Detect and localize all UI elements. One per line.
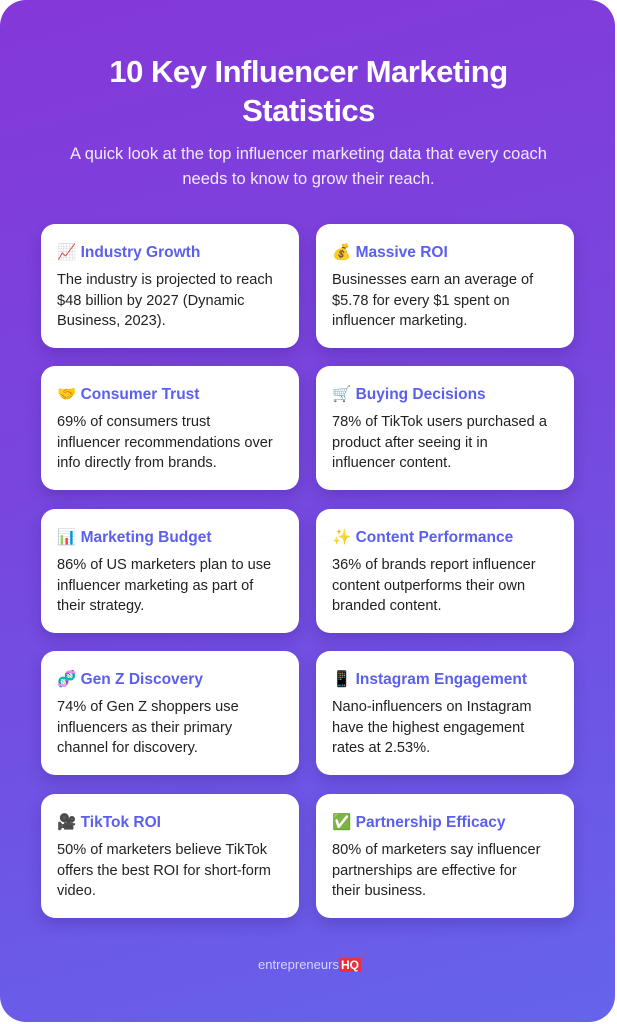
card: Gen Z Discovery xyxy=(41,651,299,775)
title xyxy=(109,54,508,128)
card: Consumer Trust: info directly from brands. xyxy=(57,455,217,471)
card: Instagram Engagement: Nano-influencers on Instagram xyxy=(332,699,532,715)
card: TikTok ROI: offers the best ROI for short-form xyxy=(57,862,271,878)
card: Partnership Efficacy xyxy=(316,794,574,918)
card: Massive ROI: influencer marketing. xyxy=(332,313,467,329)
card: Massive ROI: 💰 Massive ROI xyxy=(332,244,448,261)
card: Gen Z Discovery: 74% of Gen Z shoppers use xyxy=(57,699,239,715)
card: TikTok ROI: video. xyxy=(57,883,96,899)
card: Marketing Budget: influencer marketing as part of xyxy=(57,578,253,594)
card: Consumer Trust: 🤝 Consumer Trust xyxy=(57,386,199,403)
card: Industry Growth: Business, 2023). xyxy=(57,313,166,329)
card: Gen Z Discovery: 🧬 Gen Z Discovery xyxy=(57,671,203,688)
card: Gen Z Discovery: influencers as their primary xyxy=(57,720,232,736)
card: Industry Growth: The industry is projected to reach xyxy=(57,272,273,288)
card: Content Performance: content outperforms their own xyxy=(332,578,525,594)
card: Buying Decisions: 🛒 Buying Decisions xyxy=(332,386,486,403)
card: Buying Decisions: influencer content. xyxy=(332,455,451,471)
card: Marketing Budget xyxy=(41,509,299,633)
card: Marketing Budget: 86% of US marketers plan to use xyxy=(57,557,271,573)
card: Partnership Efficacy: partnerships are effective for xyxy=(332,862,517,878)
card: Consumer Trust: influencer recommendations over xyxy=(57,434,273,450)
card: Marketing Budget: 📊 Marketing Budget xyxy=(57,529,212,546)
card: TikTok ROI: 50% of marketers believe TikTok xyxy=(57,842,267,858)
card: Buying Decisions: 78% of TikTok users purchased a xyxy=(332,414,547,430)
logo: entrepreneursHQ xyxy=(258,957,359,972)
card: Partnership Efficacy: their business. xyxy=(332,883,426,899)
card: Instagram Engagement xyxy=(316,651,574,775)
card: Instagram Engagement: rates at 2.53%. xyxy=(332,740,430,756)
card: Buying Decisions xyxy=(316,366,574,490)
subtitle: needs to know to grow their reach. xyxy=(182,170,435,188)
card: Industry Growth: 📈 Industry Growth xyxy=(57,244,200,261)
card: Massive ROI: $5.78 for every $1 spent on xyxy=(332,292,510,308)
card: TikTok ROI xyxy=(41,794,299,918)
subtitle: A quick look at the top influencer marketing data that every coach xyxy=(70,145,547,163)
card: Partnership Efficacy: 80% of marketers say influencer xyxy=(332,842,540,858)
subtitle xyxy=(70,145,547,188)
card: Industry Growth: $48 billion by 2027 (Dynamic xyxy=(57,292,244,308)
card: Buying Decisions: product after seeing it in xyxy=(332,434,488,450)
card: Massive ROI: Businesses earn an average of xyxy=(332,272,533,288)
title: 10 Key Influencer Marketing xyxy=(109,54,508,89)
card: Gen Z Discovery: channel for discovery. xyxy=(57,740,198,756)
card: Industry Growth xyxy=(41,224,299,348)
card: Consumer Trust: 69% of consumers trust xyxy=(57,414,210,430)
card: Content Performance: 36% of brands report influencer xyxy=(332,557,536,573)
card: Content Performance xyxy=(316,509,574,633)
card: Content Performance: ✨ Content Performance xyxy=(332,529,513,546)
title: Statistics xyxy=(242,93,375,128)
card: TikTok ROI: 🎥 TikTok ROI xyxy=(57,814,161,831)
card: Content Performance: branded content. xyxy=(332,598,442,614)
card: Marketing Budget: their strategy. xyxy=(57,598,144,614)
card: Partnership Efficacy: ✅ Partnership Efficacy xyxy=(332,814,506,831)
card: Massive ROI xyxy=(316,224,574,348)
card: Instagram Engagement: 📱 Instagram Engagement xyxy=(332,671,527,688)
card: Instagram Engagement: have the highest engagement xyxy=(332,720,524,736)
card: Consumer Trust xyxy=(41,366,299,490)
